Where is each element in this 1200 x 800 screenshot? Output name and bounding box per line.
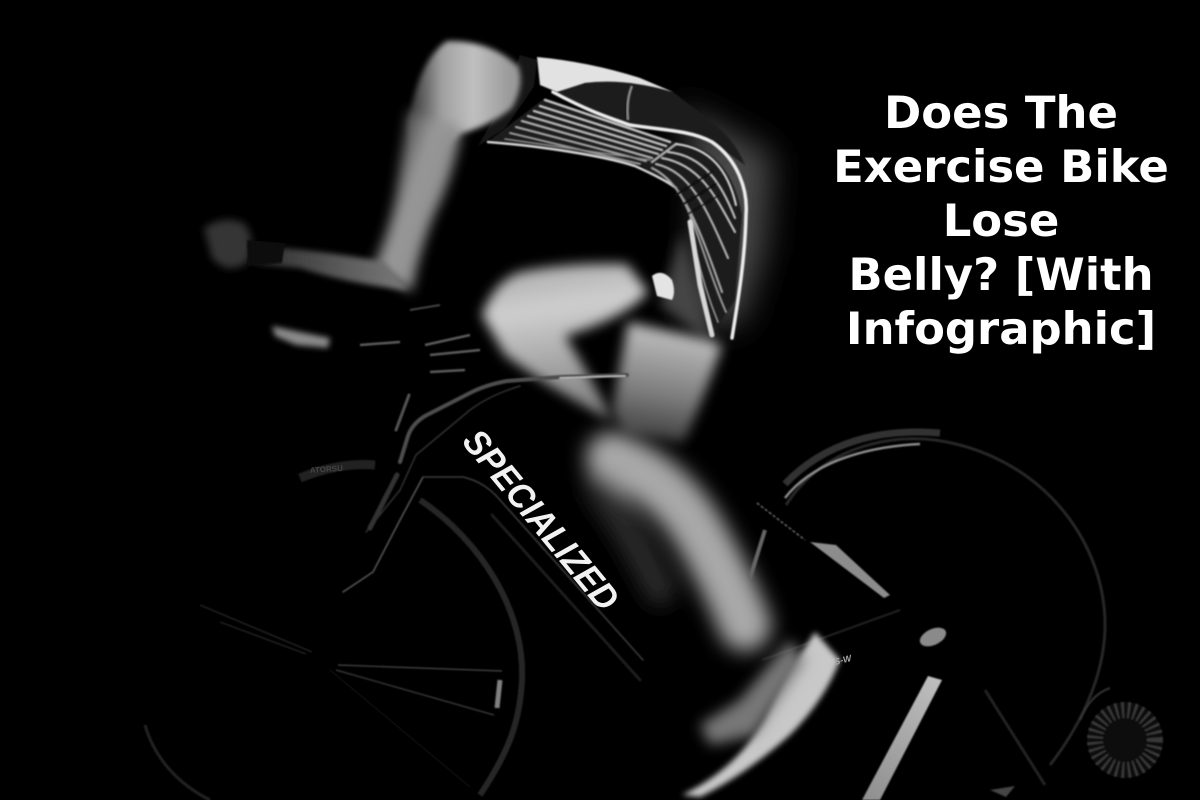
title [833, 86, 1169, 355]
tyre lettering: ATORSU [310, 464, 343, 475]
trainer stand [862, 624, 1045, 800]
white chest panel [537, 57, 673, 92]
cycling suit back glow [680, 105, 772, 325]
rider upper arm and shoulder [408, 41, 520, 170]
title: Lose [943, 194, 1059, 247]
watch band [247, 240, 285, 266]
front wheel [145, 465, 522, 800]
title: Does The [884, 86, 1118, 139]
rear wheel [750, 432, 1105, 765]
cycling suit dark chest [478, 55, 745, 165]
upper thigh [482, 264, 648, 420]
suit hip glow [660, 232, 712, 342]
suit stripes [488, 92, 746, 338]
rider forearm and hand [204, 220, 408, 290]
stripe panel backing [490, 98, 742, 335]
rear stay with label [757, 503, 900, 660]
bike brand lettering: SPECIALIZED [455, 421, 628, 618]
crank label: S-W [833, 653, 854, 667]
suit seam [628, 86, 632, 120]
title: Exercise Bike [833, 140, 1169, 193]
shoe motion blur [682, 632, 840, 797]
handlebar and hand highlights [272, 305, 480, 372]
lower leg blur [600, 458, 745, 625]
title: Belly? [With [848, 248, 1154, 301]
rider lower arm [372, 110, 462, 292]
suit hem pocket [652, 273, 674, 300]
bike frame: top tube [343, 375, 643, 680]
far leg [612, 322, 722, 442]
flywheel [1080, 688, 1163, 778]
title: Infographic] [846, 302, 1156, 355]
